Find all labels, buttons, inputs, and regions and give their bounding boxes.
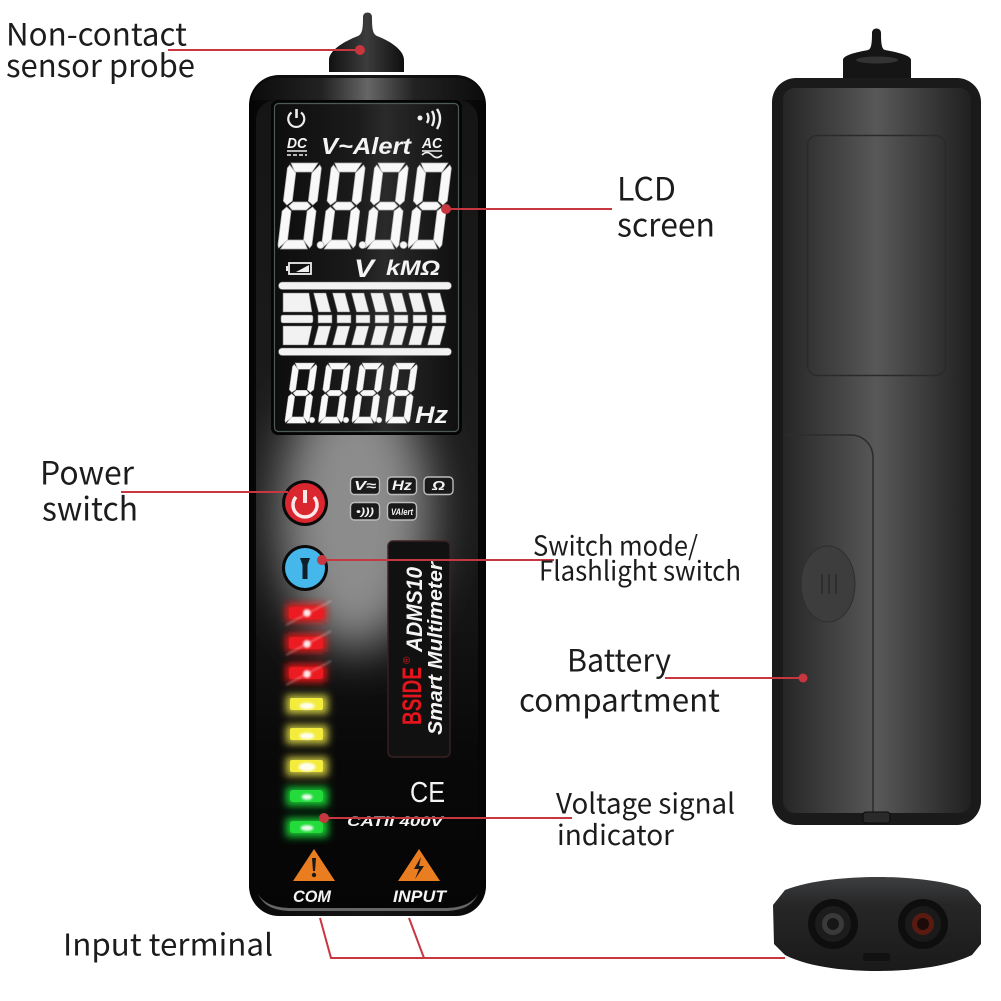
rear probe [843,28,911,80]
model number: ADMS10 [402,566,427,653]
front face [256,100,478,908]
secondary four-digit segment readout [285,363,418,423]
CAT rating: CATII 400V [347,813,445,829]
INPUT label: INPUT [393,887,448,906]
label: switch mode / flashlight [533,524,741,588]
device: front view of multimeter [249,12,486,916]
mode legend keys: VAlert [391,507,414,517]
sensor probe tip [329,12,404,72]
label: voltage signal indicator [556,782,735,854]
warning triangle INPUT [398,849,440,881]
battery symbol [287,263,311,274]
leader: LCD [441,204,612,214]
power symbol [288,109,304,127]
label: voltage signal indicator: indicator [557,814,674,854]
green LEDs [290,790,323,833]
leader: probe [168,45,365,55]
label: power switch: Power [40,448,135,494]
screen frame [271,100,462,435]
rear panel [783,88,971,813]
label: power switch: switch [42,484,138,530]
LED voltage ladder [286,601,331,837]
main four-digit segment readout [277,163,452,249]
sound symbol [418,109,440,129]
leader: input terminal [320,918,785,958]
kMΩ unit: kMΩ [386,257,440,280]
label: battery compartment: Battery [567,636,671,680]
registered mark: ® [402,656,413,664]
label: LCD screen: LCD [617,164,676,210]
label: non-contact sensor probe [6,10,195,86]
end tab [863,953,890,961]
face sheen [280,380,430,650]
product name: Smart Multimeter [425,561,447,735]
mode legend keys: V≈ [354,478,377,493]
model label panel [388,541,450,757]
red LEDs [289,607,323,679]
label: non-contact sensor probe: Non-contact [6,10,187,54]
device: rear view of multimeter [772,28,981,825]
leader: power switch [121,491,288,493]
label: switch mode / flashlight: Flashlight switch [539,550,741,588]
mode legend keys [350,477,453,520]
bottom lip [258,894,478,911]
LCD screen [271,100,462,435]
power button [282,480,328,526]
mode legend keys: Hz [392,477,412,493]
label: switch mode / flashlight: Switch mode/ [533,524,698,564]
label: input terminal: Input terminal [63,920,273,964]
battery cover outline [783,435,873,813]
leader: mode switch [317,555,554,565]
label: battery compartment: compartment [519,676,720,720]
label: power switch [40,448,138,530]
LED sparkles [286,601,331,830]
mode legend keys: •))) [356,507,375,518]
LED glow [286,604,328,837]
BSIDE brand: BSIDE [397,667,427,725]
label: voltage signal indicator: Voltage signal [556,782,735,822]
warning triangle COM [293,849,335,881]
DC label: DC [287,135,308,152]
leader: voltage indicator [319,813,572,823]
CE mark: CE [410,777,445,809]
V unit: V [354,255,377,283]
end cap [773,877,981,971]
cover latch [801,546,855,622]
leader: battery [665,674,808,682]
bottom tab [863,812,890,823]
AC label: AC [421,135,443,152]
label: battery compartment [519,636,720,720]
label: LCD screen [617,164,715,246]
COM jack [808,899,858,949]
V~Alert label: V~Alert [321,133,412,159]
Hz unit: Hz [415,402,448,429]
yellow LEDs [290,698,323,772]
top highlight band [252,78,484,100]
rear probe cap [856,56,898,64]
COM label: COM [293,887,332,906]
mode legend keys: Ω [431,478,445,493]
mode / flashlight button [282,545,328,591]
body shell [249,75,486,916]
bar graph [278,282,452,356]
rear shell [772,78,981,825]
screen panel [274,104,458,432]
label: LCD screen: screen [617,200,715,246]
INPUT jack [898,899,948,949]
top recess [808,136,946,376]
label: non-contact sensor probe: sensor probe [6,41,195,86]
device: end view with input jacks [773,877,981,971]
